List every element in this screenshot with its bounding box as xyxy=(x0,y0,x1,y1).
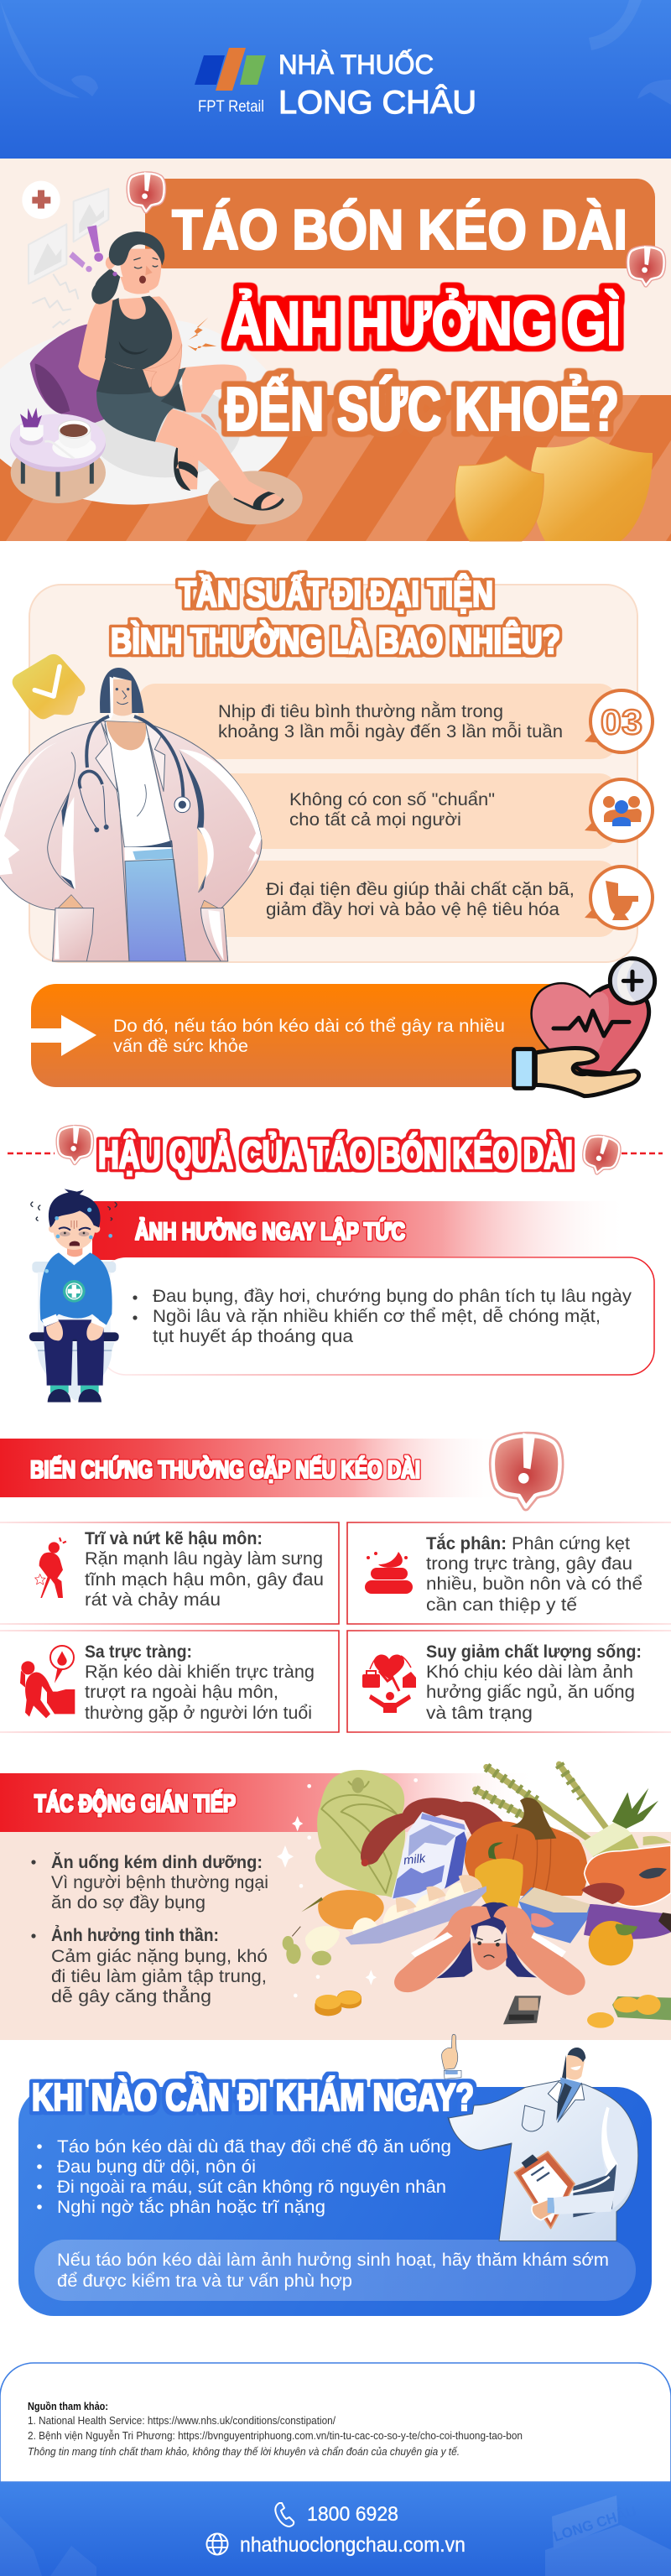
symptom list: Nghi ngờ tắc phân hoặc trĩ nặng xyxy=(57,2198,325,2217)
eggplant xyxy=(584,1904,671,1939)
stethoscope xyxy=(86,716,183,797)
card text: rát và chảy máu xyxy=(85,1590,221,1610)
shields xyxy=(455,435,653,541)
panel: when to see a doctor xyxy=(18,2075,652,2316)
woman hair back xyxy=(436,1929,537,1978)
lettuce xyxy=(315,1770,405,1898)
panel: normal frequency xyxy=(29,573,653,962)
cushion xyxy=(30,325,104,423)
card text xyxy=(426,1642,642,1723)
illustration: woman with stomach pain on cushion xyxy=(0,181,303,524)
logo wordmark: LONG CHÂU xyxy=(278,85,476,121)
illustration: female doctor xyxy=(0,668,262,961)
card: rectal prolapse xyxy=(0,1631,339,1732)
advice pill xyxy=(34,2240,636,2301)
shirt, tie xyxy=(558,2078,581,2122)
illustration: food pile and stressed woman: milk xyxy=(403,1852,427,1868)
icon: quality of life xyxy=(362,1654,416,1713)
text box: immediate effects: tụt huyết áp thoáng qua xyxy=(153,1327,353,1346)
skirt xyxy=(96,367,186,442)
banner: indirect effects: TÁC ĐỘNG GIÁN TIẾP xyxy=(34,1789,236,1818)
sausage xyxy=(361,1798,503,1865)
card text: Rặn kéo dài khiến trực tràng xyxy=(85,1663,315,1682)
card: references: 1. National Health Service: https://www.nhs.uk/conditions/constipation/ xyxy=(28,2415,336,2427)
card text: Phân cứng kẹt xyxy=(512,1534,630,1553)
row 3: giảm đầy hơi và bảo vệ hệ tiêu hóa xyxy=(266,900,559,919)
website: nhathuoclongchau.com.vn xyxy=(240,2533,466,2557)
text block: indirect effects: dễ gây căng thẳng xyxy=(51,1986,211,2006)
phone number: 1800 6928 xyxy=(307,2503,398,2526)
pumpkin xyxy=(464,1821,587,1896)
card: hemorrhoids and anal fissures xyxy=(0,1522,339,1624)
wall icons xyxy=(22,181,60,219)
coat front edges xyxy=(105,724,129,961)
text block: indirect effects: Cảm giác nặng bụng, khó xyxy=(51,1947,268,1966)
back leg + sandal xyxy=(177,445,199,489)
card text: Sa trực tràng: xyxy=(85,1642,192,1662)
shirt xyxy=(105,721,172,847)
arrow xyxy=(31,1015,96,1056)
footer band xyxy=(0,2482,671,2576)
panel: immediate effects xyxy=(92,1201,654,1375)
card: reduced quality of life xyxy=(347,1631,671,1732)
text box: immediate effects xyxy=(101,1257,654,1375)
card text: thường gặp ở người lớn tuổi xyxy=(85,1704,312,1723)
woman xyxy=(472,1944,507,1970)
sausage 2 xyxy=(581,1883,625,1904)
orange xyxy=(589,1921,633,1965)
sparkles xyxy=(277,1816,377,1985)
row 1: khoảng 3 lần mỗi ngày đến 3 lần mỗi tuần xyxy=(218,722,563,742)
pocket xyxy=(522,2105,544,2131)
card text: Tắc phân: xyxy=(426,1533,507,1553)
row 2: Không có con số "chuẩn" xyxy=(289,790,495,809)
icon: yellow check badge xyxy=(13,654,85,719)
tank top xyxy=(105,296,172,370)
leek xyxy=(581,1820,632,1856)
icon: person near toilet with blood drop xyxy=(20,1646,75,1718)
text box: immediate effects: Ngồi lâu và rặn nhiều khiến cơ thể mệt, dễ chóng mặt, xyxy=(153,1307,601,1326)
text block: indirect effects: Ảnh hưởng tinh thần: xyxy=(51,1926,219,1945)
card: references: Nguồn tham khảo: xyxy=(28,2401,108,2412)
text block: indirect effects: ăn do sợ đầy bụng xyxy=(51,1893,205,1912)
illustration: food pile and stressed woman xyxy=(277,1764,671,2028)
icon: people bubble xyxy=(585,779,653,841)
advice pill: Nếu táo bón kéo dài làm ảnh hưởng sinh hoạt, hãy thăm khám sớm xyxy=(57,2251,609,2270)
table xyxy=(23,461,91,497)
banner: common complications xyxy=(0,1433,560,1507)
symptom list xyxy=(37,2137,451,2217)
callout text: vấn đề sức khỏe xyxy=(113,1037,248,1056)
title lines two and three xyxy=(225,289,621,444)
logo: FPT Retail mark xyxy=(195,48,266,116)
head xyxy=(562,2053,585,2079)
banner: common complications: BIẾN CHỨNG THƯỜNG GẶP NẾU KÉO DÀI xyxy=(30,1455,420,1484)
text block: indirect effects: đi tiêu làm giảm tập trung, xyxy=(51,1967,267,1986)
text block: indirect effects xyxy=(31,1853,268,2006)
card text: cần can thiệp y tế xyxy=(426,1595,577,1615)
logo: FPT Retail mark: FPT Retail xyxy=(198,98,264,116)
pear xyxy=(318,1890,384,1929)
heading: normal frequency: BÌNH THƯỜNG LÀ BAO NHIÊU? xyxy=(111,620,560,662)
card text: Khó chịu kéo dài làm ảnh xyxy=(426,1663,633,1682)
header band xyxy=(0,0,671,159)
hair back xyxy=(91,268,120,304)
banner: immediate effects: ẢNH HƯỞNG NGAY LẬP TỨC xyxy=(135,1217,405,1246)
building watermark xyxy=(545,2495,671,2576)
card text xyxy=(85,1642,315,1723)
grapes and bun xyxy=(305,1926,340,1952)
milk carton xyxy=(392,1812,467,1907)
card text: Rặn mạnh lâu ngày làm sưng xyxy=(85,1549,323,1569)
logo wordmark xyxy=(278,49,476,121)
icon: warning left xyxy=(58,1126,92,1163)
eggs and tray xyxy=(352,1918,377,1936)
card text: tĩnh mạch hậu môn, gây đau xyxy=(85,1570,324,1590)
neck and face xyxy=(120,277,149,294)
text block: indirect effects: Vì người bệnh thường ngại xyxy=(51,1873,268,1892)
callout: orange conclusion bar xyxy=(31,984,587,1087)
row 3: Đi đại tiện đều giúp thải chất cặn bã, xyxy=(266,880,575,899)
panel: indirect effects xyxy=(0,1773,671,2040)
row 2 xyxy=(138,773,616,849)
pockets xyxy=(57,895,83,908)
row 1 xyxy=(138,684,616,759)
card text xyxy=(426,1533,642,1615)
neck and head xyxy=(107,721,146,750)
sandal front xyxy=(233,492,284,511)
card text: hưởng giấc ngủ, ăn uống xyxy=(426,1683,635,1702)
banner: immediate effects xyxy=(92,1201,629,1260)
icon: toilet bubble xyxy=(585,866,653,929)
card text: trong trực tràng, gây đau xyxy=(426,1554,632,1574)
title box with first line xyxy=(145,179,655,268)
symptom list: Đi ngoài ra máu, sút cân không rõ nguyên nhân xyxy=(57,2178,446,2197)
card text: Suy giảm chất lượng sống: xyxy=(426,1642,642,1662)
thighs xyxy=(182,364,247,413)
text box: immediate effects: Đau bụng, đầy hơi, chướng bụng do phân tích tụ lâu ngày xyxy=(153,1287,632,1306)
card: fecal impaction xyxy=(347,1522,671,1624)
hero background xyxy=(0,159,671,541)
hand on clipboard xyxy=(532,2198,554,2220)
illustration: male doctor pointing up xyxy=(442,2034,638,2241)
card: references: 2. Bệnh viện Nguyễn Tri Phương: https://bvnguyentriphuong.com.vn/tin-tu-cac-co-so-y-te/cho-coi-thuong-tao-bon xyxy=(28,2429,523,2442)
card text: nhiều, buồn nôn và có thể xyxy=(426,1574,642,1594)
icon: globe xyxy=(206,2533,228,2555)
building watermark: LONG CHÂU xyxy=(551,2503,638,2545)
callout text: Do đó, nếu táo bón kéo dài có thể gây ra nhiều xyxy=(113,1017,505,1036)
advice pill: để được kiểm tra và tư vấn phù hợp xyxy=(57,2272,352,2291)
icon: stool xyxy=(365,1552,413,1594)
text block: indirect effects: Ăn uống kém dinh dưỡng: xyxy=(51,1853,263,1872)
illustration: man sitting on toilet xyxy=(29,1189,119,1402)
pepper xyxy=(475,1859,523,1908)
raised hand xyxy=(444,2070,461,2079)
callout text xyxy=(113,1017,505,1056)
icon: heart in hand xyxy=(514,959,655,1096)
clipboard xyxy=(514,2152,575,2229)
icon: warning right xyxy=(580,1132,622,1177)
card: references xyxy=(0,2363,671,2482)
row 3 xyxy=(138,861,616,937)
card: references: Thông tin mang tính chất tham khảo, không thay thế lời khuyên và chẩn đoán của chuyên gia y tế. xyxy=(28,2446,460,2458)
rug xyxy=(0,319,294,505)
icon: large warning xyxy=(493,1433,560,1507)
banner: indirect effects xyxy=(0,1773,537,1832)
icon: warning top left xyxy=(128,172,164,211)
heading: when to see a doctor: KHI NÀO CẦN ĐI KHÁM NGAY? xyxy=(32,2075,474,2119)
tin xyxy=(518,1887,590,1944)
icon: phone xyxy=(275,2503,294,2527)
icon: person in pain xyxy=(35,1538,66,1598)
salmon xyxy=(585,1845,671,1907)
coins and calculator xyxy=(315,1991,362,2016)
heading: normal frequency: TẦN SUẤT ĐI ĐẠI TIỆN xyxy=(179,573,493,615)
symptom list: Táo bón kéo dài dù đã thay đổi chế độ ăn uống xyxy=(57,2137,451,2157)
torso skin + arm xyxy=(78,296,182,398)
asparagus xyxy=(476,1764,606,1845)
heading: normal frequency xyxy=(111,573,560,662)
icon: number 03 bubble xyxy=(585,690,653,752)
card text: Trĩ và nứt kẽ hậu môn: xyxy=(85,1529,263,1548)
row 1: Nhịp đi tiêu bình thường nằm trong xyxy=(218,702,503,721)
row 2: cho tất cả mọi người xyxy=(289,810,461,830)
card text: trượt ra ngoài hậu môn, xyxy=(85,1683,278,1702)
symptom list: Đau bụng dữ dội, nôn ói xyxy=(57,2157,256,2177)
hand xyxy=(143,344,182,396)
icon: warning right of title xyxy=(628,246,664,285)
logo wordmark: NHÀ THUỐC xyxy=(278,49,434,80)
icon: number 03 bubble: 03 xyxy=(601,702,642,742)
card text xyxy=(85,1529,324,1610)
card text: và tâm trạng xyxy=(426,1704,533,1723)
